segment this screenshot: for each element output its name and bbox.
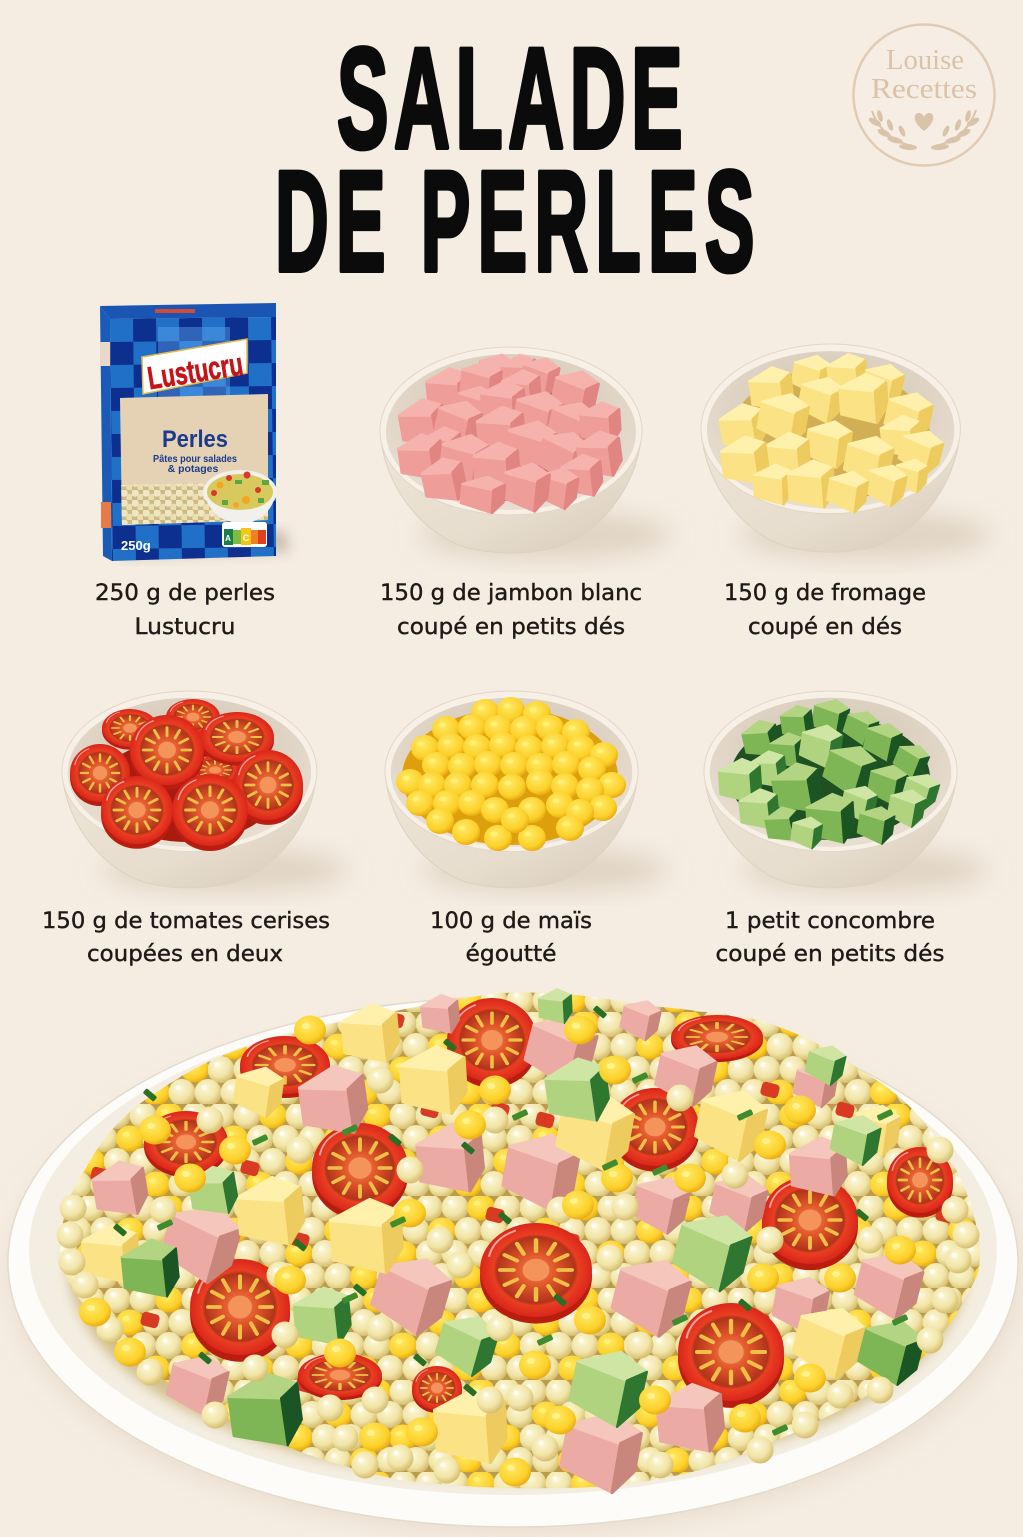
- logo: Louise Recettes: [854, 24, 994, 166]
- title: [275, 19, 754, 302]
- ham cubes: [89, 993, 926, 1495]
- label: concombre: 1 petit concombre: [725, 909, 935, 934]
- label: maïs: 100 g de maïs: [430, 909, 592, 934]
- ingredient: cheese bowl: [701, 344, 990, 559]
- label: perles: [95, 581, 275, 640]
- logo: Louise Recettes: Louise: [886, 44, 964, 76]
- label: concombre: [716, 909, 944, 967]
- ingredient: ham bowl: [380, 347, 670, 559]
- label: tomates: coupées en deux: [87, 942, 283, 967]
- ingredient: pasta box: 250g: [121, 538, 151, 553]
- corn kernels: [79, 1016, 916, 1486]
- ingredient: pasta box: Pâtes pour salades: [153, 453, 237, 465]
- ingredient: pasta box: Perles: [162, 426, 228, 453]
- brand ribbon: Lustucru: [145, 346, 245, 396]
- label: perles: 250 g de perles: [95, 581, 275, 606]
- ingredient: corn bowl: [385, 691, 667, 892]
- pearls base: [60, 992, 980, 1488]
- label: jambon: coupé en petits dés: [397, 615, 625, 640]
- label: tomates: [42, 909, 330, 967]
- nutri-score: A: [225, 534, 231, 543]
- label: fromage: coupé en dés: [748, 615, 902, 640]
- label: tomates: 150 g de tomates cerises: [42, 909, 330, 934]
- label: maïs: égoutté: [466, 942, 556, 967]
- label: jambon: 150 g de jambon blanc: [380, 581, 642, 606]
- extra pearls: [56, 1066, 980, 1484]
- herbs: [113, 1005, 909, 1436]
- tomato halves: [144, 998, 953, 1413]
- label: concombre: coupé en petits dés: [716, 942, 944, 967]
- logo: Louise Recettes: Recettes: [871, 73, 977, 105]
- ingredient: pasta box: [100, 303, 290, 561]
- plate: [8, 997, 1020, 1532]
- label: fromage: [724, 581, 926, 640]
- label: fromage: 150 g de fromage: [724, 581, 926, 606]
- cucumber cubes: [118, 988, 927, 1454]
- label: perles: Lustucru: [134, 615, 236, 640]
- ingredient: tomato bowl: [62, 691, 347, 892]
- nutri-score: C: [243, 533, 250, 543]
- cheese cubes: [79, 1001, 901, 1468]
- nutri-score: [222, 522, 267, 547]
- title: DE PERLES: [275, 143, 754, 302]
- ingredient: cucumber bowl: [704, 691, 987, 892]
- label: maïs: [430, 909, 592, 967]
- label: jambon: [380, 581, 642, 640]
- red pepper bits: [89, 1011, 956, 1394]
- ingredient: pasta box: & potages: [168, 463, 219, 475]
- plate of salad: [8, 988, 1020, 1532]
- mini bowl: [203, 470, 277, 522]
- title: SALADE: [337, 19, 683, 179]
